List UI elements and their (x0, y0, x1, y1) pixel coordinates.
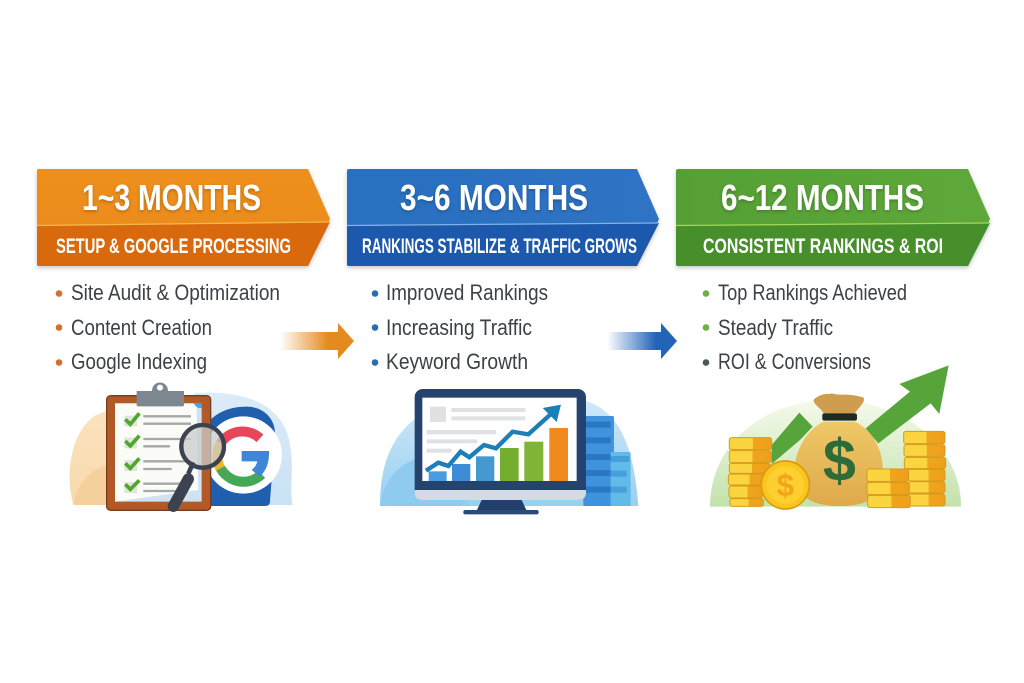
icon: money bag, coins and growth arrow (710, 365, 961, 509)
bullet list: 6-12 months (703, 280, 907, 374)
banner: 1-3 months: SETUP & GOOGLE PROCESSING (56, 235, 291, 258)
banner: 3-6 months: 3~6 MONTHS (400, 177, 588, 218)
magnifier (173, 425, 224, 506)
icon: clipboard, magnifier and Google G (70, 382, 293, 510)
bullet list: 1-3 months: Google Indexing (71, 349, 207, 374)
growth arrow (426, 405, 561, 471)
gold coin: $ (777, 468, 794, 503)
bullet list: 3-6 months (372, 280, 548, 374)
bullet list: 6-12 months: Top Rankings Achieved (718, 280, 907, 305)
green arrow (772, 365, 949, 464)
monitor (415, 389, 586, 514)
bullet list: 1-3 months: Content Creation (71, 315, 212, 340)
panel: 3-6 months (347, 169, 659, 514)
banner: 3-6 months: RANKINGS STABILIZE & TRAFFIC GROWS (362, 235, 637, 258)
checklist (124, 413, 191, 493)
banner: 6-12 months (676, 169, 990, 266)
bullet list: 3-6 months: Keyword Growth (386, 349, 528, 374)
banner: 1-3 months (37, 169, 330, 266)
bullet list: 1-3 months: Site Audit & Optimization (71, 280, 280, 305)
panel: 1-3 months (37, 169, 330, 510)
banner: 6-12 months: CONSISTENT RANKINGS & ROI (703, 235, 943, 258)
bar chart (429, 428, 568, 481)
left coin stack (728, 438, 772, 506)
bullet list: 3-6 months: Improved Rankings (386, 280, 548, 305)
icon: monitor with growth chart (380, 389, 638, 514)
banner: 6-12 months: 6~12 MONTHS (721, 177, 924, 218)
arrow: blue (607, 323, 677, 359)
bullet list: 1-3 months (56, 280, 280, 374)
Google tile (200, 407, 282, 506)
banner: 1-3 months: 1~3 MONTHS (82, 177, 261, 218)
right coin stacks (867, 431, 946, 508)
panel: 6-12 months (676, 169, 990, 509)
banner: 3-6 months (347, 169, 659, 266)
money bag (795, 393, 883, 506)
clipboard (107, 382, 211, 510)
screen text placeholders (427, 407, 525, 453)
money bag: $ (823, 427, 856, 494)
gold coin (761, 461, 809, 509)
bullet list: 3-6 months: Increasing Traffic (386, 315, 532, 340)
arrow: orange (280, 323, 354, 359)
bullet list: 6-12 months: ROI & Conversions (718, 349, 871, 374)
server stack (583, 416, 631, 506)
bullet list: 6-12 months: Steady Traffic (718, 315, 833, 340)
